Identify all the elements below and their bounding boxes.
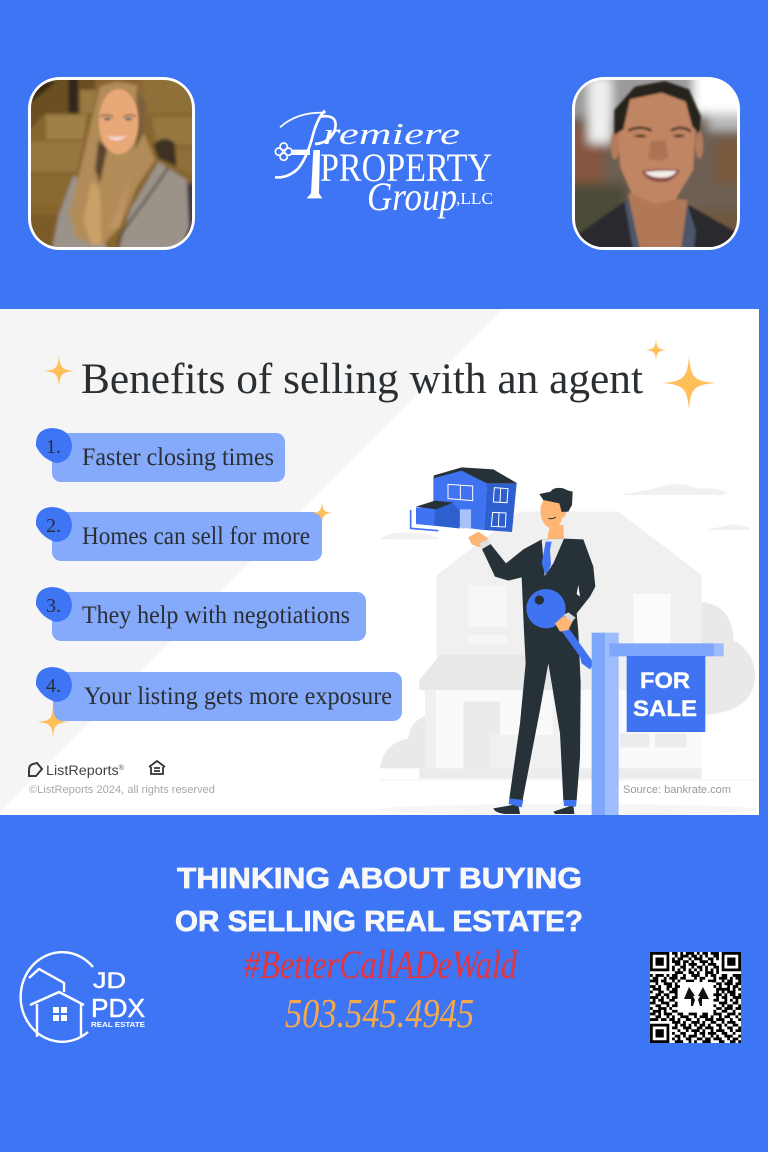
list item 4: 4. [46,675,61,697]
list item 1: Faster closing times [82,444,274,471]
list item 2: 2. [46,515,61,537]
copyright: ©ListReports 2024, all rights reserved [29,784,215,796]
sign post and arm [592,633,724,815]
list item 3: They help with negotiations [82,602,350,629]
logo house line art [21,952,93,1042]
logo JD: JD [93,968,126,993]
ListReports wordmark: ListReports [46,762,117,778]
logo: Premiere Property Group [275,111,493,219]
logo window [53,1007,67,1021]
illustration: for sale sign [592,633,724,815]
photo: man agent [572,77,740,250]
hashtag: #BetterCallADeWald [244,942,518,987]
QR center arrows [684,987,709,1006]
list item 1: 1. [46,436,61,458]
list item 2 [36,507,322,561]
icon: ListReports mark [29,763,42,776]
source: Source: bankrate.com [623,784,731,796]
list item 2: Homes can sell for more [82,523,310,550]
sign text SALE: SALE [633,696,697,721]
ListReports wordmark: ® [119,764,125,772]
heading: Benefits of selling with an agent [81,356,643,403]
sparkle: large right [662,356,716,410]
sign text FOR: FOR [640,668,690,693]
QR code [650,952,741,1043]
logo: LLC: ,LLC [456,189,493,208]
icon: equal housing [149,761,165,774]
logo: key and swash [275,111,336,198]
panel: benefits infographic [0,309,759,815]
logo: word Property: PROPERTY [320,145,492,190]
sparkle: below item 4 [37,706,69,738]
logo: word Group: Group [367,174,457,219]
sparkle: small top right [645,339,667,361]
list item 3: 3. [46,595,61,617]
sparkle: left of title [43,355,75,387]
logo real estate: REAL ESTATE [91,1022,145,1029]
illustration: blue model house [411,467,517,532]
photo: woman agent [28,77,195,250]
logo PDX: PDX [91,993,145,1023]
sparkle: on item 2 [311,502,333,524]
phone number: 503.545.4945 [285,990,474,1036]
illustration: background house [380,484,757,815]
list item 4 [36,667,402,721]
logo: JD PDX Real Estate [21,952,145,1042]
list item 4: Your listing gets more exposure [84,683,392,710]
illustration: agent in suit [468,488,595,814]
list item 1 [36,428,285,482]
call to action line 2: OR SELLING REAL ESTATE? [175,906,583,938]
logo: word Premiere: Premiere [322,116,460,151]
call to action line 1: THINKING ABOUT BUYING [177,863,582,895]
list item 3 [36,587,366,641]
